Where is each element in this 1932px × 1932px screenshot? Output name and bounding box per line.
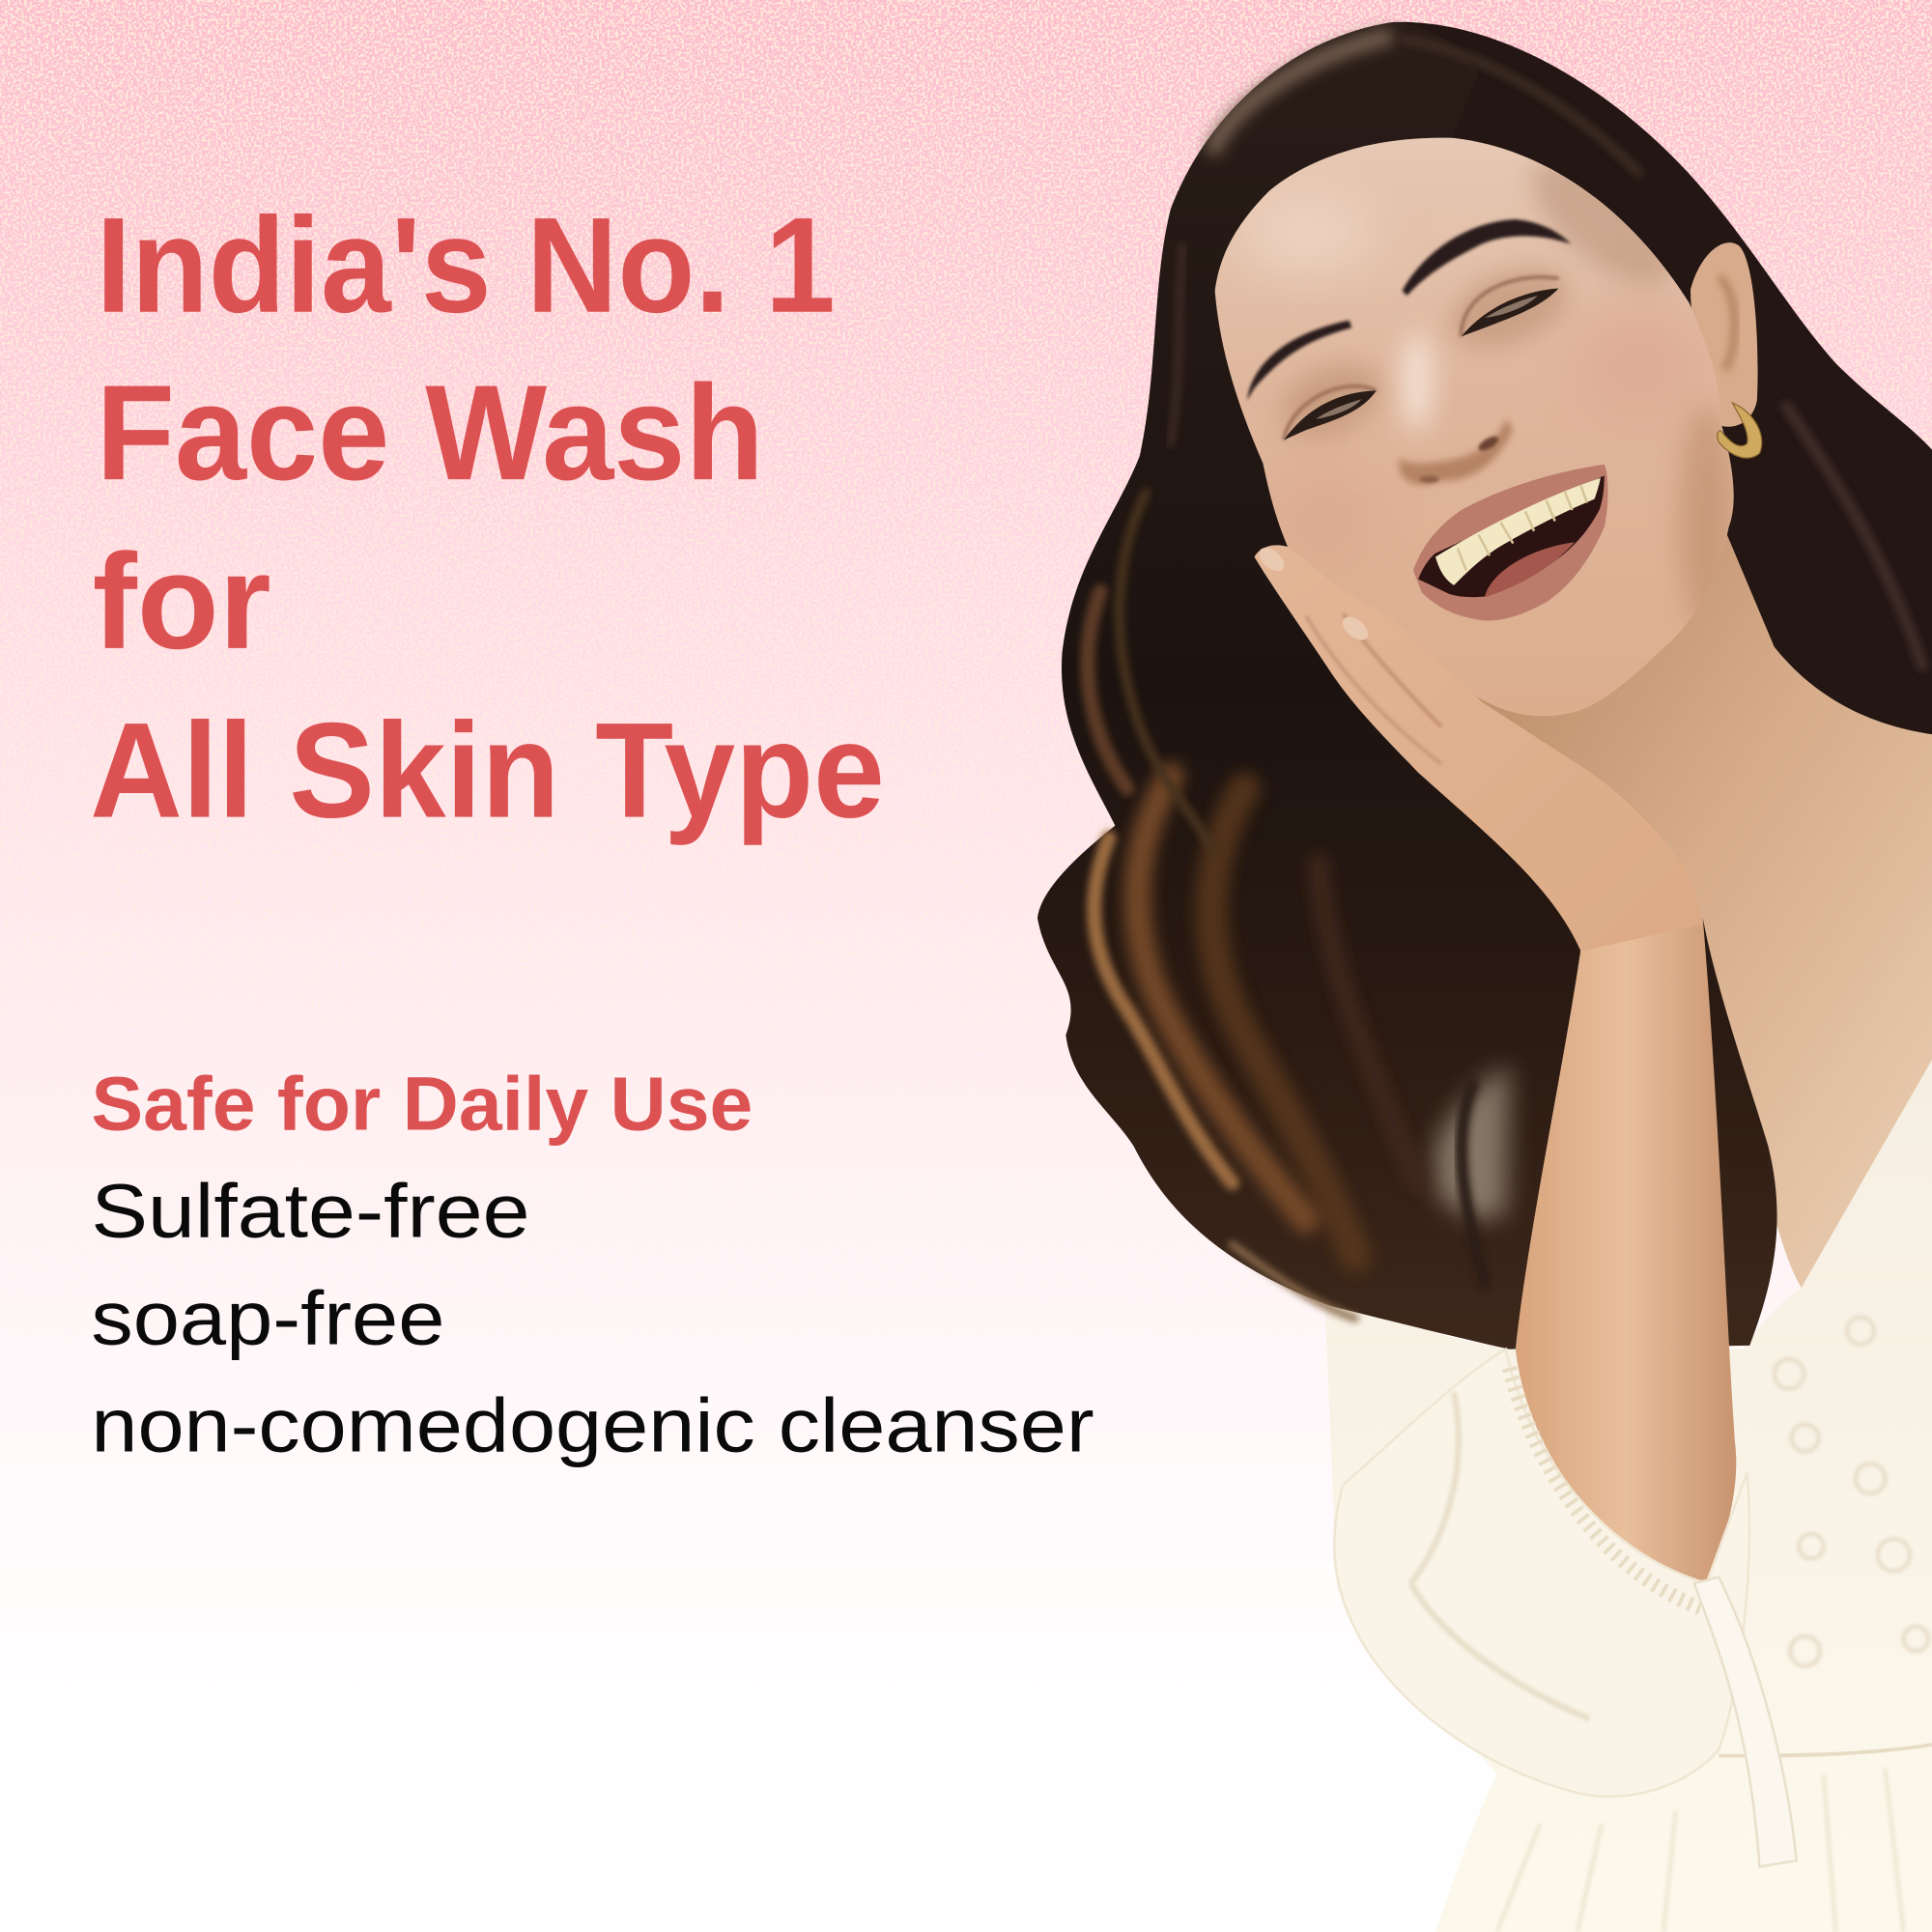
- background gradient: [0, 0, 1932, 1385]
- sleeve: [1334, 1350, 1797, 1866]
- right eye: [1462, 277, 1559, 336]
- heading: All Skin Type: [90, 695, 885, 846]
- left eye: [1284, 386, 1377, 440]
- benefits text block: Sulfate-free: [91, 1168, 529, 1254]
- sleeve tie: [1694, 1577, 1797, 1866]
- ear: [1690, 242, 1758, 427]
- dress: [1324, 1060, 1932, 1932]
- heading: India's No. 1: [96, 189, 836, 341]
- dress eyelet embroidery: [1775, 1318, 1928, 1665]
- hand: [1254, 543, 1703, 952]
- front hair silhouette: [1037, 22, 1777, 1350]
- heading: Face Wash: [96, 356, 764, 508]
- right eyebrow: [1403, 219, 1571, 296]
- back hair on right: [1392, 22, 1932, 734]
- mouth: [1413, 465, 1608, 621]
- face: [1215, 138, 1734, 716]
- hair light gap near dress: [1435, 1065, 1509, 1218]
- benefits text block: [91, 1168, 1094, 1468]
- earring: [1718, 403, 1762, 458]
- heading: for: [93, 526, 271, 677]
- heading: [90, 189, 885, 846]
- hair strands and highlights: [1088, 37, 1922, 1319]
- benefits text block: non-comedogenic cleanser: [91, 1382, 1094, 1468]
- neck and chest: [1441, 529, 1932, 1288]
- forearm: [1516, 918, 1736, 1583]
- subheading: Safe for Daily Use: [91, 1061, 753, 1147]
- left eyebrow: [1247, 321, 1351, 401]
- benefits text block: soap-free: [91, 1275, 444, 1361]
- photo: smiling woman: [1037, 22, 1932, 1932]
- nose: [1399, 419, 1513, 485]
